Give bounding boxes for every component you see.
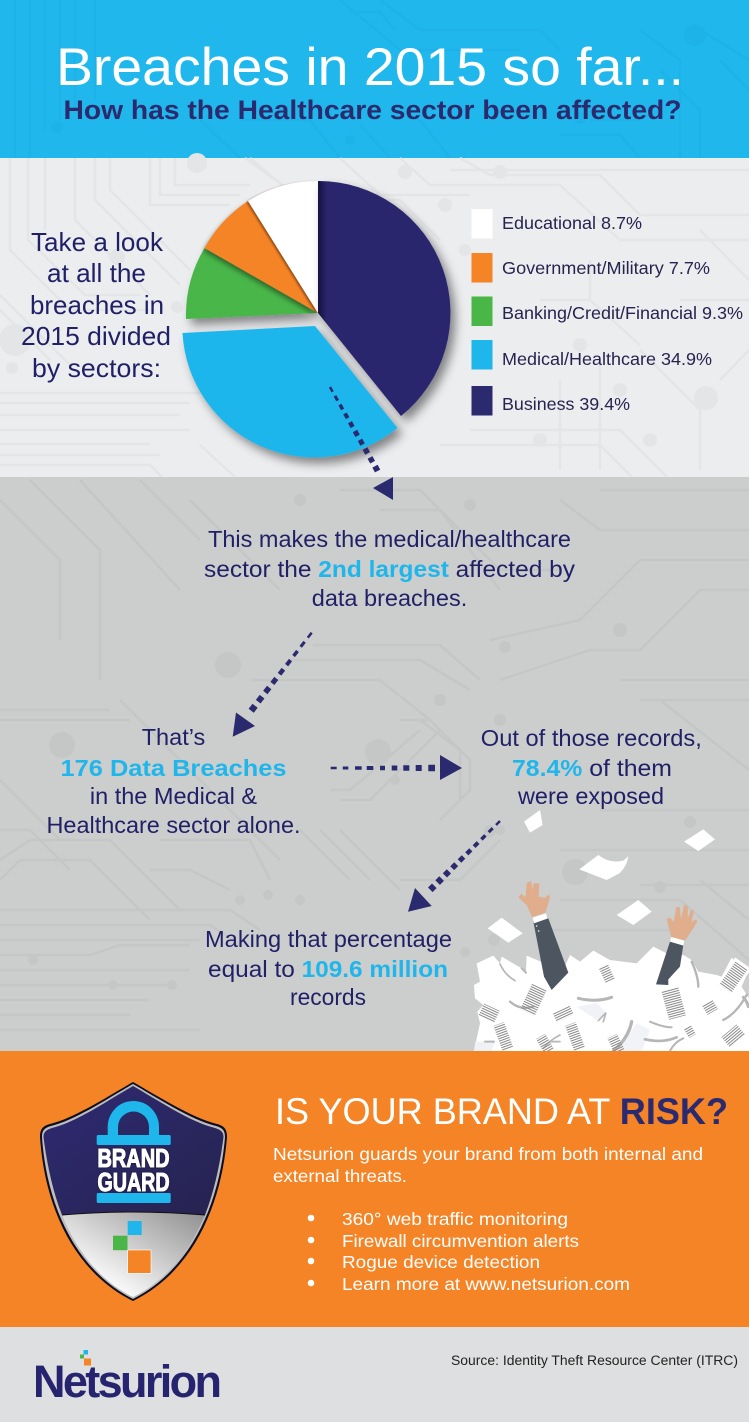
sector intro text: breaches in xyxy=(30,290,164,320)
arrow: breaches to exposed xyxy=(331,755,462,780)
statement: records exposed: were exposed xyxy=(517,783,664,809)
statement: 2nd largest: This makes the medical/healthcare xyxy=(208,526,571,552)
feature list: Learn more at www.netsurion.com xyxy=(342,1274,630,1294)
arrow: pie to statement xyxy=(330,387,393,500)
sector intro text: by sectors: xyxy=(32,353,161,383)
shield wordmark: GUARD xyxy=(98,1169,170,1197)
call to action heading: IS YOUR BRAND AT RISK? xyxy=(275,1091,728,1132)
legend item: business: Business 39.4% xyxy=(502,394,630,414)
panel: call to action xyxy=(0,1051,749,1327)
icon: right arm xyxy=(656,905,697,985)
call to action description: external threats. xyxy=(273,1166,407,1186)
feature list: Firewall circumvention alerts xyxy=(342,1231,579,1251)
statement: 2nd largest: data breaches. xyxy=(312,585,467,611)
icon: brand guard shield xyxy=(40,1082,227,1301)
legend item: business xyxy=(472,386,630,416)
icon: loose papers xyxy=(488,810,715,943)
feature list: Rogue device detection xyxy=(342,1252,540,1272)
title: Breaches in 2015 so far... xyxy=(56,38,684,97)
panel: footer xyxy=(0,1327,749,1422)
source credit: Source: Identity Theft Resource Center (ITRC) xyxy=(451,1353,738,1368)
statement: records exposed: 78.4% of them xyxy=(512,755,672,781)
arrow: exposed to records xyxy=(408,821,500,912)
legend item: medical: Medical/Healthcare 34.9% xyxy=(502,349,712,369)
panel: header xyxy=(0,0,749,158)
statement: 2nd largest xyxy=(204,526,575,611)
statement: 176 data breaches: Healthcare sector alone. xyxy=(46,812,300,838)
pie slice: medical xyxy=(182,326,398,458)
legend xyxy=(472,209,743,416)
subtitle: How has the Healthcare sector been affected? xyxy=(64,95,682,125)
statement: 109.6 million records: records xyxy=(290,984,366,1010)
feature list: 360° web traffic monitoring xyxy=(342,1209,568,1229)
pie chart xyxy=(182,181,450,458)
statement: 2nd largest: sector the 2nd largest affected by xyxy=(204,556,575,582)
arrow: statement to breaches xyxy=(233,633,312,737)
pie slice: banking xyxy=(186,248,318,319)
icon: shield squares xyxy=(113,1221,151,1273)
legend item: medical xyxy=(472,340,712,370)
pie slice: business xyxy=(318,181,450,416)
panel: healthcare statistics xyxy=(0,477,749,1051)
sector intro text: 2015 divided xyxy=(21,321,171,351)
statement: 176 data breaches: 176 Data Breaches xyxy=(60,755,286,781)
statement: 109.6 million records: Making that percentage xyxy=(205,926,452,952)
sector intro text: at all the xyxy=(47,258,146,288)
pie slice: educational xyxy=(248,181,318,313)
call to action description: Netsurion guards your brand from both internal and xyxy=(273,1144,703,1164)
legend item: educational xyxy=(472,209,642,238)
shield wordmark xyxy=(98,1145,170,1197)
statement: 109.6 million records xyxy=(205,926,452,1010)
call to action description xyxy=(273,1144,703,1186)
statement: records exposed: Out of those records, xyxy=(481,725,702,751)
legend item: banking xyxy=(472,296,743,326)
pie slice: government xyxy=(204,201,318,313)
statement: records exposed xyxy=(481,725,702,809)
statement: 109.6 million records: equal to 109.6 million xyxy=(208,956,448,982)
icon: paper pile xyxy=(474,947,749,1054)
legend item: government xyxy=(472,253,710,282)
icon: printed sheets xyxy=(478,957,749,1054)
legend item: educational: Educational 8.7% xyxy=(502,213,642,233)
legend item: banking: Banking/Credit/Financial 9.3% xyxy=(502,303,743,323)
legend item: government: Government/Military 7.7% xyxy=(502,258,710,278)
icon: padlock xyxy=(97,1101,171,1203)
statement: 176 data breaches xyxy=(46,724,300,838)
statement: 176 data breaches: in the Medical & xyxy=(90,783,257,809)
shield wordmark: BRAND xyxy=(98,1145,170,1173)
feature list xyxy=(308,1209,630,1294)
illustration: person buried in paper xyxy=(474,810,749,1054)
panel: sector breakdown xyxy=(0,153,749,477)
icon: left arm xyxy=(519,882,568,990)
sector intro text: Take a look xyxy=(31,227,164,257)
sector intro text xyxy=(21,227,171,383)
statement: 176 data breaches: That’s xyxy=(142,724,205,750)
logo: Netsurion: Netsurion xyxy=(33,1356,222,1407)
